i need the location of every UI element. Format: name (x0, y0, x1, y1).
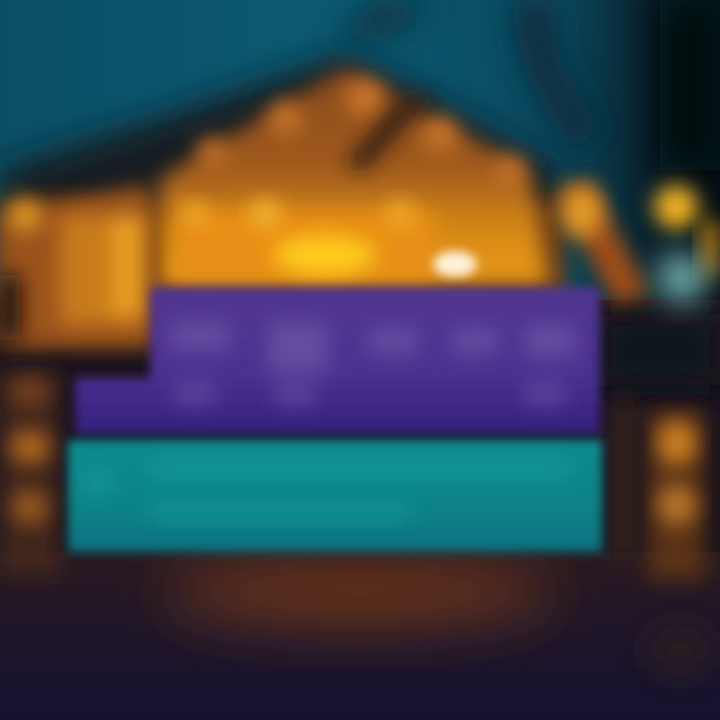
left wing (0, 185, 150, 345)
roof lights (198, 79, 524, 184)
side columns of lights (0, 370, 704, 580)
panel: teal (68, 440, 602, 552)
ground (0, 552, 720, 720)
window glow left (0, 199, 145, 340)
backing wall joining wings (0, 200, 565, 345)
house body (160, 68, 548, 288)
tree branch silhouette (345, 92, 435, 170)
lit interior band (180, 199, 477, 278)
house silhouette (0, 68, 565, 345)
blurred text rows in purple panel (170, 322, 575, 403)
blurred text rows in teal panel (85, 460, 570, 521)
panel: purple (75, 287, 600, 434)
right wing lights (555, 180, 720, 305)
horizon haze behind the roof (0, 55, 560, 240)
right side dark foliage (330, 0, 720, 385)
dark band beneath the house (0, 300, 720, 720)
